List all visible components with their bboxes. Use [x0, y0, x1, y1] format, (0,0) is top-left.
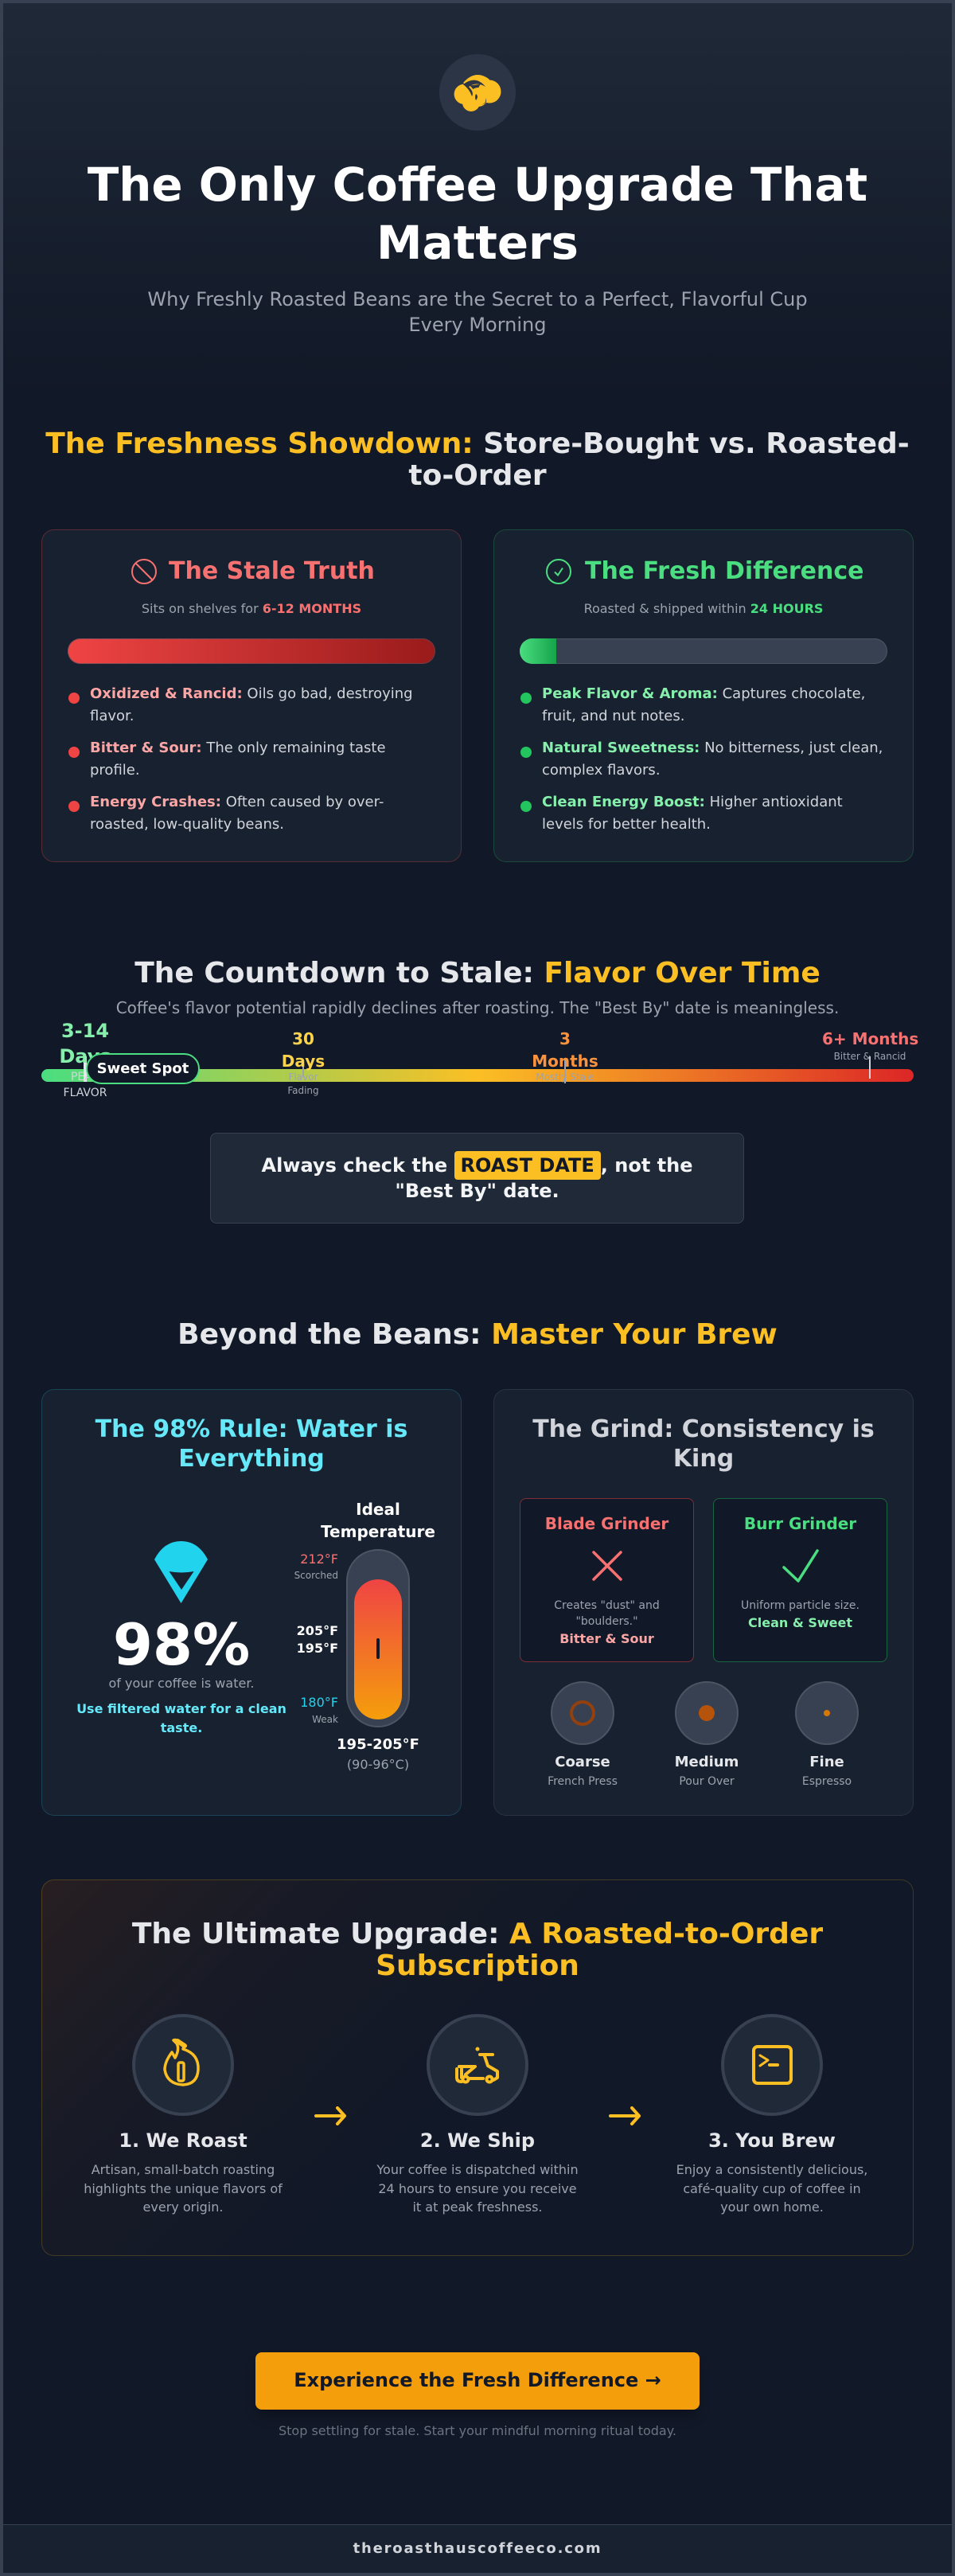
item: energy: roasted, low-quality beans.	[90, 816, 284, 833]
text: step 1	[84, 2162, 283, 2215]
celsius text: (90-96°C)	[347, 1757, 409, 1772]
item: clean energy: Clean Energy Boost: Higher antioxidant	[542, 794, 843, 810]
grind size: fine	[795, 1681, 859, 1788]
countdown description: Coffee's flavor potential rapidly declines after roasting. The "Best By" date is meaningless.	[116, 998, 839, 1017]
marker: 3-14 days	[59, 1020, 111, 1099]
heading: 98% rule	[96, 1415, 407, 1473]
marker: 3-14 days: Days	[59, 1045, 111, 1067]
text: step 1: Artisan, small-batch roasting	[92, 2162, 275, 2177]
gradient bar	[41, 1069, 914, 1082]
marker: 6+ months	[822, 1029, 918, 1079]
label: weak: Weak	[312, 1714, 338, 1725]
icon: check	[782, 1549, 819, 1583]
heading: step 3: 3. You Brew	[708, 2129, 836, 2152]
icon: terminal	[721, 2014, 823, 2116]
item: clean energy	[520, 794, 843, 833]
blade description	[554, 1599, 660, 1628]
panel: the grind	[493, 1389, 914, 1816]
label: fine: Fine	[809, 1754, 844, 1770]
text: step 2: Your coffee is dispatched within	[376, 2162, 579, 2177]
marker: 30 days: Flavor	[289, 1071, 318, 1083]
subtitle	[147, 288, 808, 336]
call to action note: Stop settling for stale. Start your mindful morning ritual today.	[279, 2423, 676, 2438]
heading: ultimate upgrade	[132, 1918, 823, 1982]
text: step 2: it at peak freshness.	[412, 2199, 543, 2215]
section heading: countdown to stale: The Countdown to Stale: Flavor Over Time	[134, 957, 821, 989]
marker: 30 days: 30	[292, 1029, 314, 1048]
sweet spot pill: Sweet Spot	[97, 1060, 189, 1077]
heading: 98% rule: Everything	[178, 1445, 325, 1473]
list: stale effects	[68, 685, 413, 833]
step 2: we ship	[358, 2014, 597, 2221]
sweet spot pill	[86, 1053, 200, 1084]
callout: roast date: "Best By" date.	[395, 1180, 559, 1202]
panel: the fresh difference	[493, 529, 914, 862]
sublabel: french press: French Press	[548, 1775, 618, 1788]
marker: 30 days: Fading	[287, 1085, 319, 1096]
icon: cross	[592, 1551, 622, 1581]
heading: ideal temperature: Temperature	[321, 1522, 435, 1541]
text: step 1: every origin.	[143, 2199, 223, 2215]
panel: the 98% rule	[41, 1389, 462, 1816]
card: burr grinder	[713, 1498, 887, 1662]
marker: 6+ months: Bitter & Rancid	[834, 1051, 906, 1062]
sublabel: espresso: Espresso	[802, 1775, 852, 1788]
bar: shipping time	[520, 638, 887, 664]
text: step 3: Enjoy a consistently delicious,	[676, 2162, 867, 2177]
heading: 98% rule: The 98% Rule: Water is	[96, 1415, 407, 1443]
item: energy: Energy Crashes: Often caused by over-	[90, 794, 384, 810]
icon: coffee beans in circle	[439, 54, 516, 131]
timeline chart	[41, 1020, 918, 1099]
thermometer chart	[321, 1500, 435, 1772]
icon: check circle	[546, 559, 571, 584]
subtitle: Every Morning	[409, 314, 546, 336]
item: oxidized: Oxidized & Rancid: Oils go bad, destroying	[90, 685, 413, 702]
call to action button: Experience the Fresh Difference →	[294, 2369, 661, 2391]
blade description: "boulders."	[575, 1615, 638, 1628]
heading: ultimate upgrade: The Ultimate Upgrade: A Roasted-to-Order	[132, 1918, 823, 1950]
burr result: Clean & Sweet	[748, 1615, 852, 1630]
label: 205F 195F: 205°F	[297, 1623, 338, 1638]
title	[88, 158, 867, 270]
heading: the grind: The Grind: Consistency is	[532, 1415, 875, 1443]
label: scorched: Scorched	[294, 1570, 338, 1581]
text: step 2	[358, 2160, 597, 2217]
icon: scooter	[427, 2014, 528, 2116]
list: fresh benefits	[520, 685, 883, 833]
heading: the fresh difference: The Fresh Difference	[585, 557, 863, 585]
item: peak flavor: Peak Flavor & Aroma: Captures chocolate,	[542, 685, 865, 702]
marker: 3-14 days: 3-14	[61, 1020, 109, 1042]
blade description: Creates "dust" and	[554, 1599, 660, 1612]
section heading: beyond the beans: Beyond the Beans: Master Your Brew	[177, 1318, 778, 1351]
item: natural sweetness: complex flavors.	[542, 762, 661, 779]
marker: 3 months: Months	[532, 1052, 598, 1071]
item: energy	[68, 794, 384, 833]
item: bitter: profile.	[90, 762, 140, 779]
filtered water tip: taste.	[161, 1720, 202, 1735]
heading: burr: Burr Grinder	[744, 1514, 856, 1533]
section heading: freshness showdown: The Freshness Showdown: Store-Bought vs. Roasted-	[45, 427, 910, 460]
grind size: coarse	[548, 1681, 618, 1788]
item: bitter	[68, 740, 386, 779]
marker: 30 days: Days	[282, 1052, 325, 1071]
text: step 2: 24 hours to ensure you receive	[378, 2181, 577, 2196]
item: bitter: Bitter & Sour: The only remaining taste	[90, 740, 386, 756]
stat caption: of your coffee is water.	[108, 1676, 255, 1691]
item: oxidized	[68, 685, 413, 724]
step 3: you brew	[653, 2014, 891, 2221]
marker: 3-14 days: FLAVOR	[64, 1087, 107, 1099]
burr description: Uniform particle size.	[741, 1599, 860, 1612]
item: natural sweetness: Natural Sweetness: No bitterness, just clean,	[542, 740, 883, 756]
section heading: freshness showdown	[45, 427, 910, 492]
text: step 3	[653, 2160, 891, 2217]
range text: 195-205°F	[337, 1736, 419, 1753]
callout: roast date	[210, 1133, 744, 1224]
callout: roast date: Always check the , not the	[261, 1154, 692, 1177]
heading: the stale truth: The Stale Truth	[169, 557, 375, 585]
label: 205F 195F: 195°F	[297, 1641, 338, 1656]
arrow: step 2 to step 3	[609, 2106, 641, 2125]
marker: 3 months: Mostly Stale	[536, 1071, 594, 1083]
blade result: Bitter & Sour	[559, 1631, 654, 1646]
grind size: medium	[675, 1681, 739, 1788]
bar: shelf time	[68, 638, 435, 664]
heading: ultimate upgrade: Subscription	[376, 1950, 579, 1982]
heading: the grind: King	[673, 1445, 734, 1473]
heading: ideal temperature: Ideal	[356, 1500, 400, 1519]
temperature labels	[294, 1551, 338, 1725]
icon: medium	[675, 1681, 739, 1745]
icon: coarse	[551, 1681, 614, 1745]
title: Matters	[376, 216, 579, 270]
heading: step 2: 2. We Ship	[420, 2129, 535, 2152]
item: natural sweetness	[520, 740, 883, 779]
item: peak flavor: fruit, and nut notes.	[542, 708, 684, 724]
panel: the ultimate upgrade	[41, 1879, 914, 2256]
panel: the stale truth	[41, 529, 462, 862]
item: peak flavor	[520, 685, 865, 724]
marker: 3 months	[532, 1029, 598, 1083]
call to action button	[255, 2352, 700, 2410]
marker: 30 days	[282, 1029, 325, 1096]
heading: step 1: 1. We Roast	[119, 2129, 248, 2152]
item: clean energy: levels for better health.	[542, 816, 711, 833]
marker: 6+ months: 6+ Months	[822, 1029, 918, 1048]
stat: 98%: 98%	[113, 1611, 250, 1678]
text: step 1: highlights the unique flavors of	[84, 2181, 283, 2196]
filtered water tip	[76, 1701, 286, 1735]
subtitle: Why Freshly Roasted Beans are the Secret to a Perfect, Flavorful Cup	[147, 288, 808, 310]
icon: flame	[132, 2014, 234, 2116]
label: coarse: Coarse	[555, 1754, 610, 1770]
footer	[0, 2524, 955, 2576]
text: step 3: café-quality cup of coffee in	[683, 2181, 861, 2196]
label: 180F: 180°F	[300, 1695, 338, 1710]
heading: ideal temperature	[321, 1500, 435, 1541]
marker: 3-14 days: PEAK	[71, 1071, 99, 1083]
text: step 3: your own home.	[720, 2199, 824, 2215]
thermometer	[346, 1549, 410, 1727]
arrow: step 1 to step 2	[314, 2106, 346, 2125]
step 1: we roast	[84, 2014, 283, 2215]
header gradient background	[0, 0, 955, 398]
icon: prohibited	[131, 559, 157, 584]
callout: roast date: ROAST DATE	[461, 1154, 594, 1177]
footer: theroasthauscoffeeco.com	[353, 2540, 602, 2557]
label: 205F 195F	[297, 1623, 338, 1656]
shelf time text: Sits on shelves for 6-12 MONTHS	[142, 601, 361, 616]
heading: the grind	[532, 1415, 875, 1473]
title: The Only Coffee Upgrade That	[88, 158, 867, 212]
icon: water drop	[154, 1541, 208, 1603]
label: medium: Medium	[675, 1754, 739, 1770]
icon: fine	[795, 1681, 859, 1745]
marker: 3 months: 3	[559, 1029, 571, 1048]
card: blade grinder	[520, 1498, 694, 1662]
sublabel: pour over: Pour Over	[679, 1775, 735, 1788]
label: 212F: 212°F	[300, 1551, 338, 1567]
section heading: freshness showdown: to-Order	[408, 459, 547, 492]
item: oxidized: flavor.	[90, 708, 134, 724]
filtered water tip: Use filtered water for a clean	[76, 1701, 286, 1716]
heading: blade: Blade Grinder	[545, 1514, 668, 1533]
shipping time text: Roasted & shipped within 24 HOURS	[584, 601, 823, 616]
